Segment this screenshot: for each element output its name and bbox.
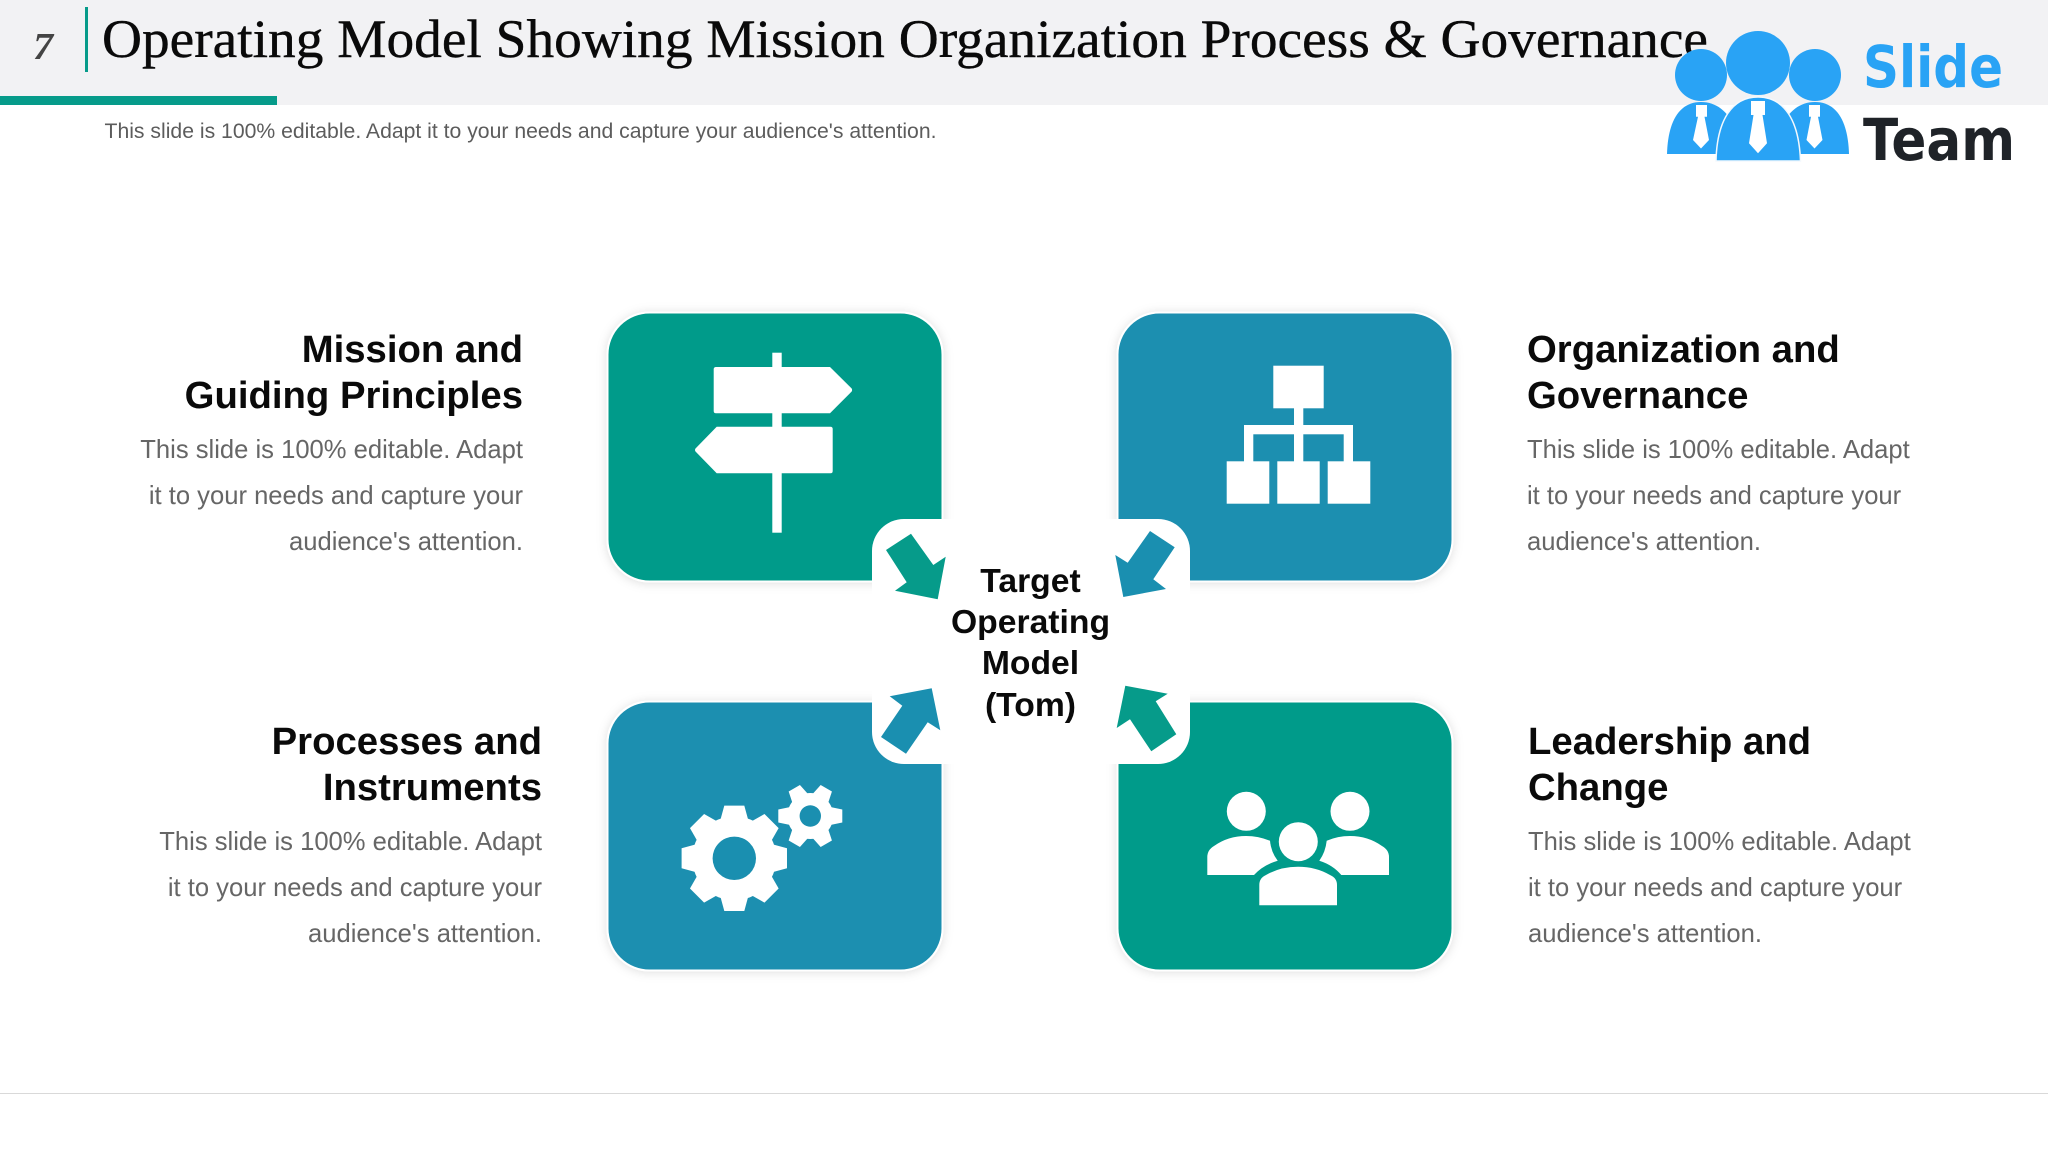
logo: SlideTeam: Team [1863, 106, 2015, 174]
center label: Target [980, 562, 1081, 600]
center label: Model [982, 644, 1079, 682]
icon: people [1207, 792, 1389, 905]
logo: SlideTeam: Slide [1863, 33, 2003, 101]
text block: leadership and change: it to your needs and capture your [1528, 874, 1903, 902]
text block: organization and governance: This slide is 100% editable. Adapt [1527, 436, 1910, 464]
title: Operating Model Showing Mission Organization Process & Governance [102, 9, 1708, 69]
text block: mission and guiding principles [140, 328, 523, 556]
text block: processes and instruments: Processes and [272, 720, 542, 763]
panel: organization and governance [1118, 312, 1452, 582]
text block: organization and governance [1527, 328, 1910, 556]
text block: leadership and change: audience's attention. [1528, 920, 1762, 948]
text block: mission and guiding principles: Mission and [302, 328, 523, 371]
panel: leadership and change [1118, 702, 1452, 970]
center label [951, 562, 1110, 724]
text block: processes and instruments: Instruments [323, 766, 542, 809]
title divider [85, 7, 88, 72]
text block: processes and instruments [159, 720, 542, 948]
text block: leadership and change [1528, 720, 1911, 948]
center label: (Tom) [985, 686, 1076, 724]
arrow: top-right [1115, 531, 1175, 597]
header accent bar [0, 96, 277, 105]
icon: org chart [1227, 366, 1370, 504]
text block: mission and guiding principles: audience's attention. [289, 528, 523, 556]
text block: processes and instruments: it to your needs and capture your [168, 874, 542, 902]
text block: processes and instruments: audience's attention. [308, 920, 542, 948]
center white cutout [872, 519, 1190, 764]
text block: leadership and change: Leadership and [1528, 720, 1811, 763]
arrow: bottom-right [1117, 686, 1176, 751]
panel: mission and guiding principles [608, 312, 942, 582]
icon: gears [682, 784, 842, 911]
slide number: 7 [33, 26, 55, 68]
logo: SlideTeam [1667, 31, 2015, 174]
text block: organization and governance: it to your needs and capture your [1527, 482, 1902, 510]
center label: Operating [951, 603, 1110, 641]
text block: mission and guiding principles: it to your needs and capture your [149, 482, 523, 510]
text block: organization and governance: Governance [1527, 374, 1748, 417]
text block: processes and instruments: This slide is 100% editable. Adapt [159, 828, 542, 856]
text block: organization and governance: audience's attention. [1527, 528, 1761, 556]
text block: mission and guiding principles: This slide is 100% editable. Adapt [140, 436, 523, 464]
header band [0, 0, 2048, 105]
arrow: top-left [886, 534, 946, 599]
text block: organization and governance: Organization and [1527, 328, 1840, 371]
panel: processes and instruments [608, 702, 942, 970]
icon: signpost [695, 353, 852, 533]
text block: mission and guiding principles: Guiding Principles [185, 374, 523, 417]
arrow: bottom-left [881, 688, 940, 754]
text block: leadership and change: This slide is 100% editable. Adapt [1528, 828, 1911, 856]
subtitle: This slide is 100% editable. Adapt it to your needs and capture your audience's attention. [104, 119, 936, 143]
text block: leadership and change: Change [1528, 766, 1668, 809]
